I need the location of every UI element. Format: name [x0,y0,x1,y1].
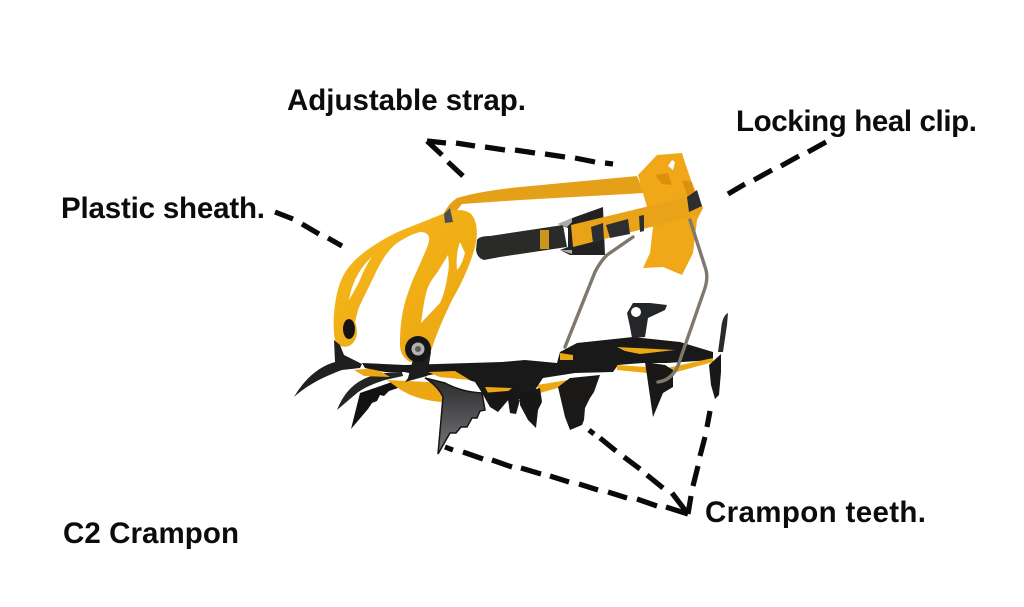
title: C2 Crampon: C2 Crampon [63,517,239,550]
icon: strap logo [540,230,549,249]
icon: upper adjustable strap [443,176,644,222]
label: plastic sheath: Plastic sheath. [61,192,265,225]
icon: rear rivet [343,319,355,339]
icon: lower strap with buckle [571,193,703,247]
arrow: adjustable strap [427,141,613,176]
icon: metal buckle [558,207,605,255]
label: crampon teeth: Crampon teeth. [705,496,926,529]
arrow: locking heal clip [728,142,826,194]
icon: large front-side tooth [425,378,485,454]
icon: middle tooth [558,375,600,430]
icon: heel cup [638,153,703,275]
icon: webbing loop at sheath [444,208,453,223]
icon: spike group front [294,340,403,429]
icon: small middle teeth [482,388,542,428]
icon: heel teeth [645,354,721,417]
icon: sheath rivet and tab [405,336,431,382]
label: locking heal clip: Locking heal clip. [736,105,977,138]
icon: rear blade [718,313,728,352]
icon: yellow heel plate accents [428,347,713,395]
icon: rear wire bail [565,220,707,382]
arrow: plastic sheath [275,212,342,246]
icon: heel lever [627,303,667,338]
label: adjustable strap: Adjustable strap. [287,84,526,117]
illustration: C2 crampon [294,153,728,454]
icon: plastic toe sheath [334,210,477,362]
icon: main linkage bar [362,337,713,395]
arrow: crampon teeth [445,411,710,514]
icon: yellow base plate pieces [354,368,568,402]
icon: black strap tab [476,225,567,260]
